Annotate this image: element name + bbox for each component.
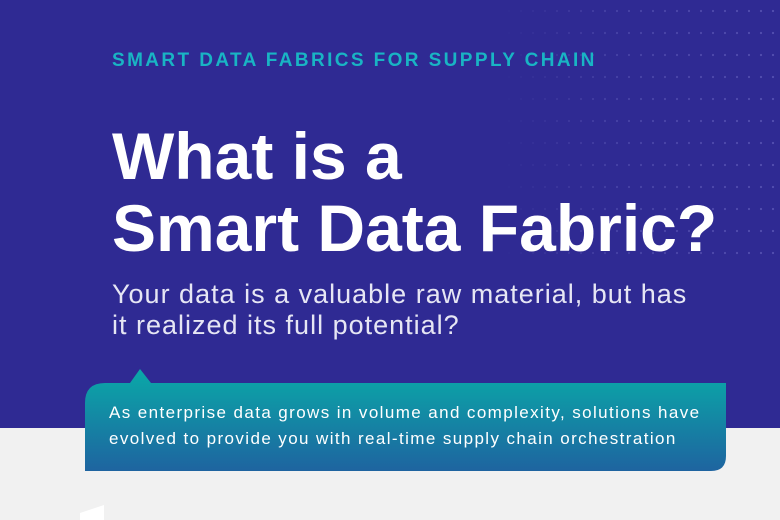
decorative white shape bbox=[80, 505, 104, 520]
kicker heading: SMART DATA FABRICS FOR SUPPLY CHAIN bbox=[112, 50, 597, 71]
subtitle: Your data is a valuable raw material, but has bbox=[112, 279, 687, 309]
subtitle bbox=[112, 279, 687, 340]
title bbox=[112, 119, 717, 265]
dot pattern bbox=[544, 10, 774, 254]
title: What is a bbox=[112, 119, 402, 193]
callout bbox=[85, 369, 726, 471]
callout text: evolved to provide you with real-time supply chain orchestration bbox=[109, 429, 677, 448]
callout text: As enterprise data grows in volume and complexity, solutions have bbox=[109, 403, 700, 422]
callout text bbox=[109, 403, 700, 448]
title: Smart Data Fabric? bbox=[112, 191, 717, 265]
subtitle: it realized its full potential? bbox=[112, 310, 460, 340]
